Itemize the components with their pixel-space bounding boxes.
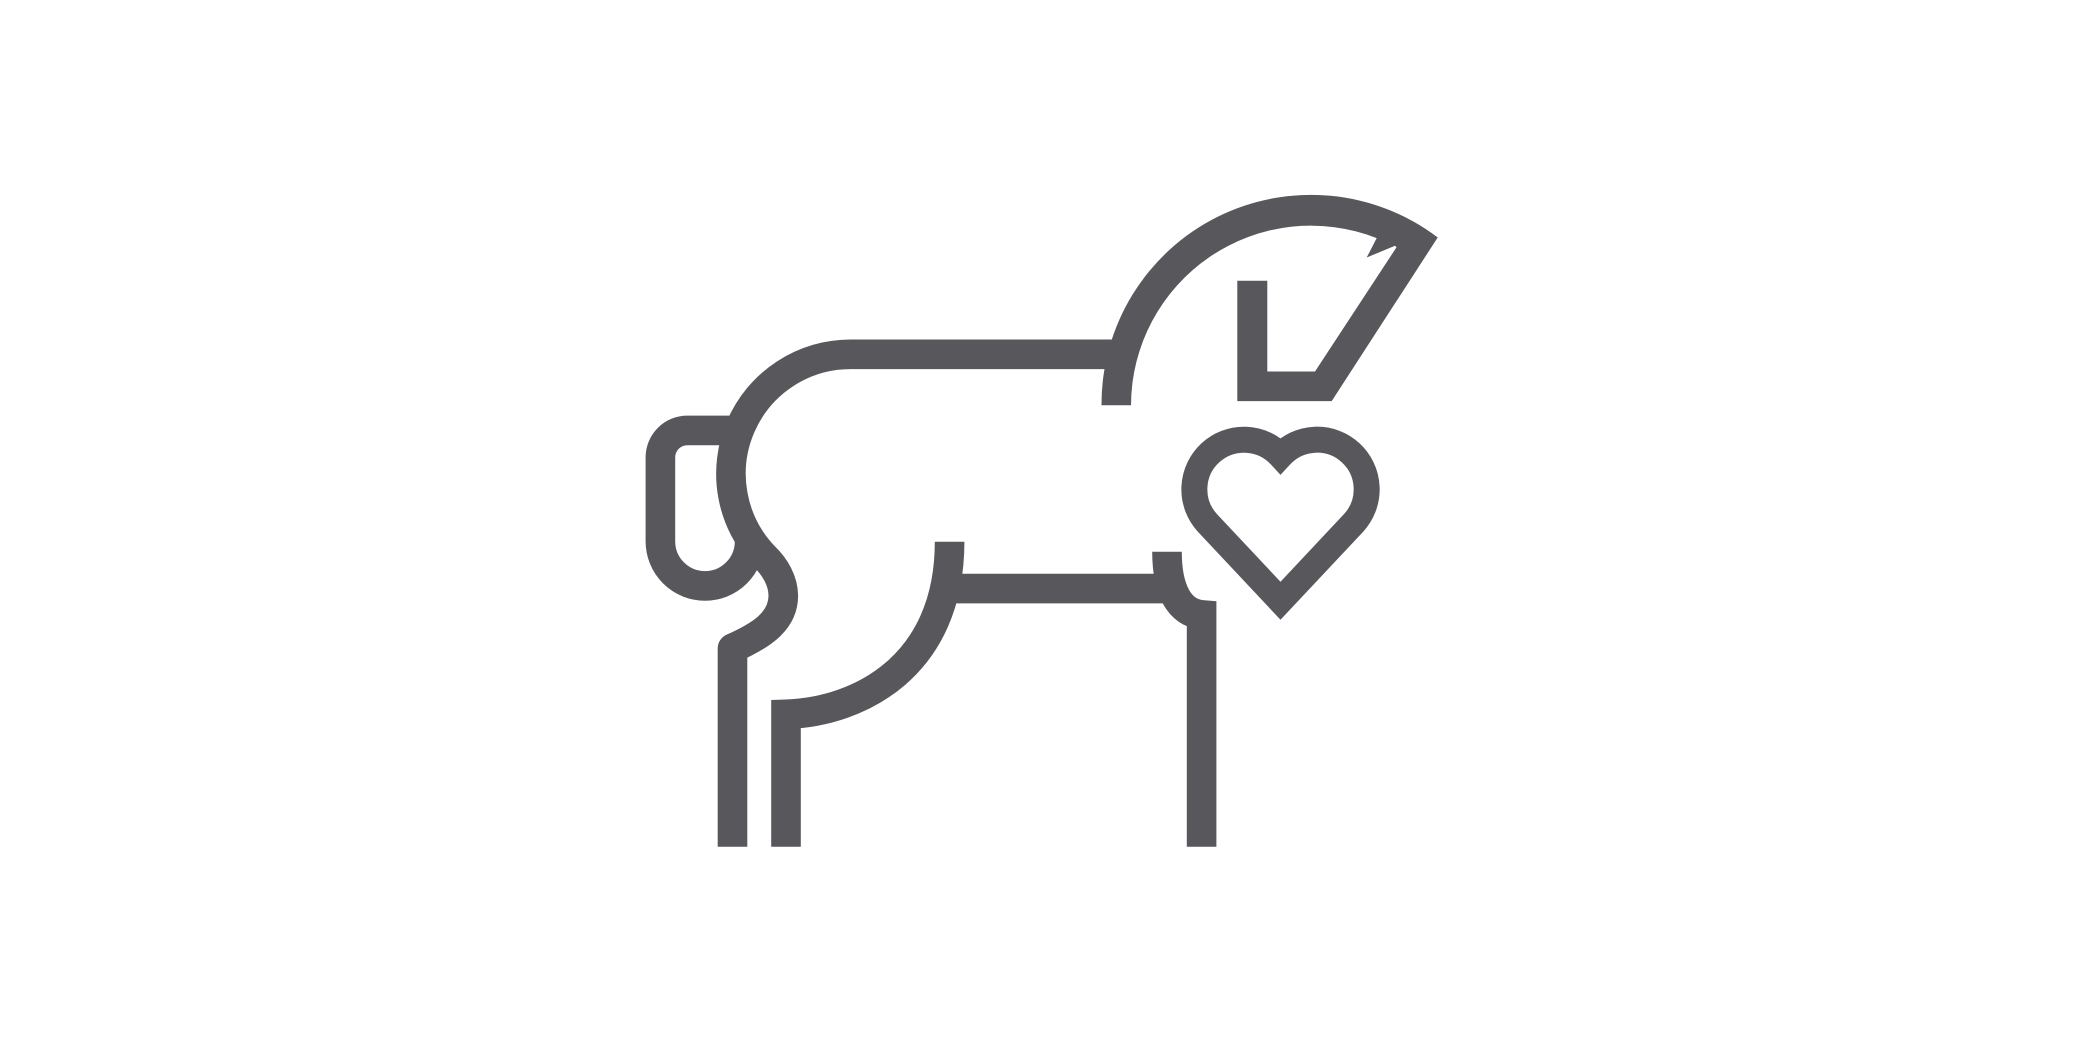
horse neck and head (1101, 195, 1438, 405)
horse belly (950, 574, 1178, 603)
horse inner hind leg and flank (786, 542, 950, 847)
horse tail (660, 430, 750, 586)
icon: horse outline (660, 195, 1438, 847)
horse front leg (1167, 552, 1202, 847)
horse back and hind leg (731, 354, 1123, 847)
icon: heart (1194, 440, 1367, 601)
